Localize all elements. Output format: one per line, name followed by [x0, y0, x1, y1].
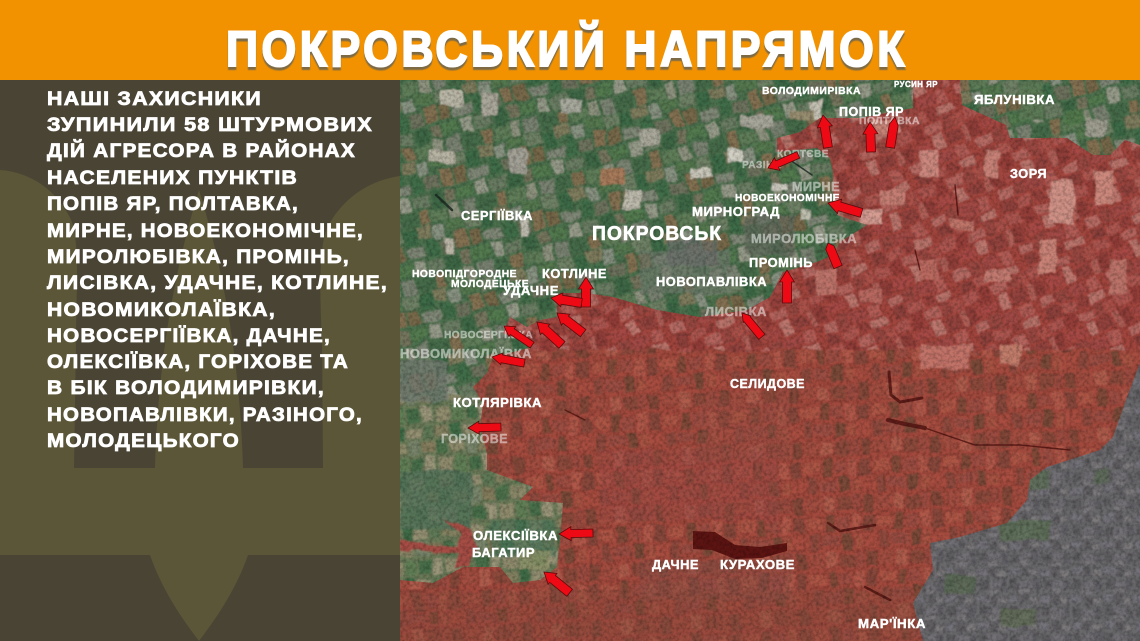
panel text: МИРОЛЮБІВКА, ПРОМІНЬ, [47, 246, 350, 268]
label: Селидове: СЕЛИДОВЕ [730, 377, 805, 391]
label: Разіне: РАЗІНЕ [742, 159, 781, 171]
panel text: ДІЙ АГРЕСОРА В РАЙОНАХ [47, 138, 356, 162]
label: Зоря: ЗОРЯ [1010, 167, 1047, 181]
panel text: НОВОМИКОЛАЇВКА, [47, 298, 276, 321]
title text: ПОКРОВСЬКИЙ НАПРЯМОК [226, 20, 908, 77]
label: Новопавлівка: НОВОПАВЛІВКА [656, 275, 767, 289]
panel: left text panel [0, 80, 400, 641]
label: Новопідгородне: НОВОПІДГОРОДНЕ [412, 268, 517, 280]
arrow: toward Горіхове [468, 421, 501, 434]
icon: trident watermark [0, 170, 400, 641]
arrow: toward Володимирівка [816, 114, 835, 149]
arrow: toward Миролюбівка [824, 241, 842, 269]
map: red tongue in the south-west [400, 517, 478, 568]
arrow: toward Попів Яр [863, 122, 879, 152]
panel text: ОЛЕКСІЇВКА, ГОРІХОВЕ ТА [47, 350, 349, 373]
label: Котлине: КОТЛИНЕ [542, 267, 607, 281]
label: Новоекономічне: НОВОЕКОНОМІЧНЕ [735, 192, 840, 204]
panel text: НАШІ ЗАХИСНИКИ [47, 88, 262, 110]
arrow: toward Багатир [540, 567, 574, 598]
label: Дачне: ДАЧНЕ [652, 558, 699, 572]
attack arrows [468, 114, 899, 598]
panel text: НАСЕЛЕНИХ ПУНКТІВ [47, 167, 298, 189]
arrow: toward Новосергіївка [501, 321, 535, 350]
label: Яблунівка: ЯБЛУНІВКА [974, 93, 1055, 107]
map: unoccupied green farmland [400, 80, 1140, 583]
arrow: toward Разіне [765, 148, 801, 174]
panel text: НОВОПАВЛІВКИ, РАЗІНОГО, [47, 404, 363, 426]
map: grey urban area in the east [913, 364, 1140, 641]
label: Багатир: БАГАТИР [472, 546, 535, 560]
label: Молодецьке: МОЛОДЕЦЬКЕ [451, 278, 529, 290]
label: Лисівка: ЛИСІВКА [705, 305, 767, 319]
label: Курахове: КУРАХОВЕ [720, 558, 795, 572]
label: Мар'їнка: МАР'ЇНКА [858, 616, 926, 631]
map: Kurakhove reservoir [693, 531, 787, 559]
map: grain overlay [400, 80, 1140, 641]
panel text [47, 88, 388, 452]
label: Сергіївка: СЕРГІЇВКА [461, 208, 533, 223]
label: Володимирівка: ВОЛОДИМИРІВКА [762, 85, 861, 97]
label: Русин Яр: РУСИН ЯР [894, 79, 938, 89]
panel text: МОЛОДЕЦЬКОГО [47, 430, 240, 452]
label: Коптєве: КОПТЄВЕ [777, 148, 829, 160]
panel text: НОВОСЕРГІЇВКА, ДАЧНЕ, [47, 324, 331, 347]
label: Покровськ: ПОКРОВСЬК [592, 223, 722, 245]
panel text: В БІК ВОЛОДИМИРІВКИ, [47, 377, 325, 399]
arrow: toward Полтавка [886, 116, 899, 148]
label: Миролюбівка: МИРОЛЮБІВКА [751, 232, 857, 246]
label: Промінь: ПРОМІНЬ [749, 256, 813, 270]
label: Горіхове: ГОРІХОВЕ [441, 432, 508, 446]
arrow: toward Новоекономічне [826, 196, 864, 220]
label: Котлярівка: КОТЛЯРІВКА [453, 396, 542, 410]
label: Мирноград: МИРНОГРАД [692, 205, 780, 219]
panel text: ЗУПИНИЛИ 58 ШТУРМОВИХ [47, 114, 373, 136]
label: Мирне: МИРНЕ [792, 180, 840, 194]
label: Олексіївка: ОЛЕКСІЇВКА [473, 528, 558, 543]
arrow: toward Удачне [550, 291, 583, 310]
map panel [390, 70, 1140, 641]
settlement labels [400, 79, 1055, 631]
label: Попів Яр: ПОПІВ ЯР [839, 105, 904, 119]
arrow: toward Новосергіївка east [532, 317, 567, 350]
arrow: toward Лисівка [738, 310, 766, 340]
label: Новомиколаївка: НОВОМИКОЛАЇВКА [400, 346, 532, 361]
label: Полтавка: ПОЛТАВКА [859, 115, 920, 127]
map: ravines and dams [436, 160, 1070, 600]
arrow: toward Котлине [578, 277, 594, 307]
arrow: toward Промінь [780, 270, 794, 303]
arrow: toward Новомиколаївка [491, 351, 526, 369]
map: red occupied territory [390, 70, 1140, 641]
panel text: ЛИСІВКА, УДАЧНЕ, КОТЛИНЕ, [47, 272, 388, 294]
arrow: toward Удачне south [553, 307, 587, 339]
label: Новосергіївка: НОВОСЕРГІЇВКА [444, 328, 533, 341]
label: Удачне: УДАЧНЕ [503, 284, 559, 298]
arrow: toward Олексіївка [559, 526, 593, 541]
panel text: ПОПІВ ЯР, ПОЛТАВКА, [47, 193, 299, 215]
panel text: МИРНЕ, НОВОЕКОНОМІЧНЕ, [47, 220, 364, 242]
title banner [0, 0, 1140, 80]
